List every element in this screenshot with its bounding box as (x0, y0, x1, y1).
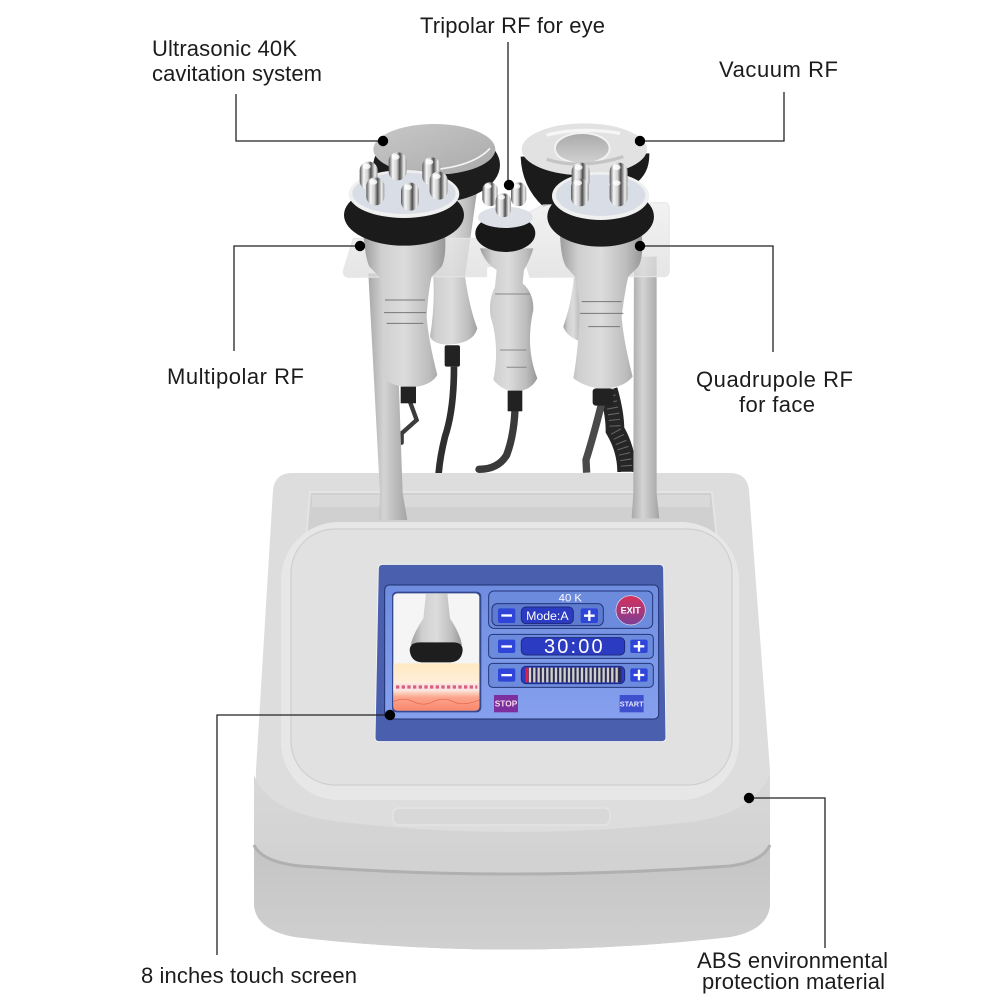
screen interface panel (385, 585, 659, 719)
raised panel (281, 522, 739, 800)
tripolar handle rings (495, 294, 530, 367)
tripolar handle (480, 248, 537, 392)
acrylic holder plate (343, 203, 669, 277)
lower shell (254, 775, 770, 950)
timer row (489, 634, 653, 658)
stop button (494, 695, 518, 712)
mode control row: Mode:A (526, 609, 569, 623)
start button (620, 695, 644, 712)
callout: ABS material: ABS environmental (697, 948, 888, 973)
intensity row (489, 663, 653, 687)
callout: quadrupole RF: Quadrupole RF (696, 367, 853, 392)
callout: vacuum RF (635, 57, 838, 146)
mode control row (489, 591, 653, 628)
multipolar cable boot (401, 387, 416, 403)
callout: ABS material (697, 793, 888, 994)
screen bezel (375, 564, 666, 742)
quadrupole handle rings (580, 302, 623, 327)
left pole (368, 273, 407, 520)
multipolar pins (360, 152, 448, 211)
groove (254, 845, 770, 874)
callout: touch screen: 8 inches touch screen (141, 963, 357, 988)
panel inset (291, 529, 732, 785)
vacuum head (521, 123, 649, 207)
ultrasonic cable boot (445, 345, 460, 367)
timer row: 30:00 (544, 636, 603, 658)
support poles (368, 257, 659, 520)
tripolar cable boot (508, 391, 522, 411)
multipolar head (344, 152, 464, 246)
lower band (254, 845, 770, 950)
mode control row: EXIT (621, 606, 641, 616)
callout: tripolar RF (420, 13, 605, 190)
top tray (306, 492, 717, 540)
start button: START (620, 700, 644, 709)
mode control row: 40 K (559, 593, 582, 605)
handpieces (343, 123, 669, 411)
cable: tripolar handpiece (479, 400, 515, 469)
callout: tripolar RF: Tripolar RF for eye (420, 13, 605, 38)
callout: quadrupole RF (635, 241, 853, 417)
ultrasonic handle (423, 170, 480, 345)
tray band (312, 495, 710, 507)
callout: quadrupole RF: for face (739, 392, 815, 417)
callout: ultrasonic cavitation: cavitation system (152, 61, 322, 86)
machine base (254, 473, 770, 950)
callout: ABS material: protection material (702, 969, 885, 994)
quadrupole head (547, 163, 654, 247)
callout: multipolar RF (167, 241, 365, 389)
multipolar handle (363, 233, 445, 387)
base body (254, 473, 770, 950)
touch screen (375, 564, 666, 742)
quadrupole pins (571, 163, 628, 206)
cable: ultrasonic handpiece (439, 367, 454, 473)
cable: multipolar handpiece (402, 400, 417, 443)
callout: ultrasonic cavitation (152, 36, 388, 146)
ultrasonic head (373, 124, 500, 202)
machine cables (402, 367, 627, 473)
cable: coiled quadrupole (608, 390, 627, 472)
callout: touch screen (141, 710, 395, 988)
cable: quadrupole straight (586, 403, 602, 473)
right pole (632, 257, 659, 518)
quadrupole handle (560, 233, 642, 388)
treatment preview (392, 592, 481, 712)
multipolar handle rings (384, 300, 426, 323)
stop button: STOP (495, 699, 518, 709)
callout: vacuum RF: Vacuum RF (719, 57, 838, 82)
tripolar pins (482, 182, 526, 217)
handle recess (393, 808, 610, 825)
callout: multipolar RF: Multipolar RF (167, 364, 304, 389)
callout: ultrasonic cavitation: Ultrasonic 40K (152, 36, 297, 61)
vacuum handle (563, 253, 583, 341)
cable boot: quadrupole (593, 388, 613, 406)
tripolar head (475, 182, 535, 252)
